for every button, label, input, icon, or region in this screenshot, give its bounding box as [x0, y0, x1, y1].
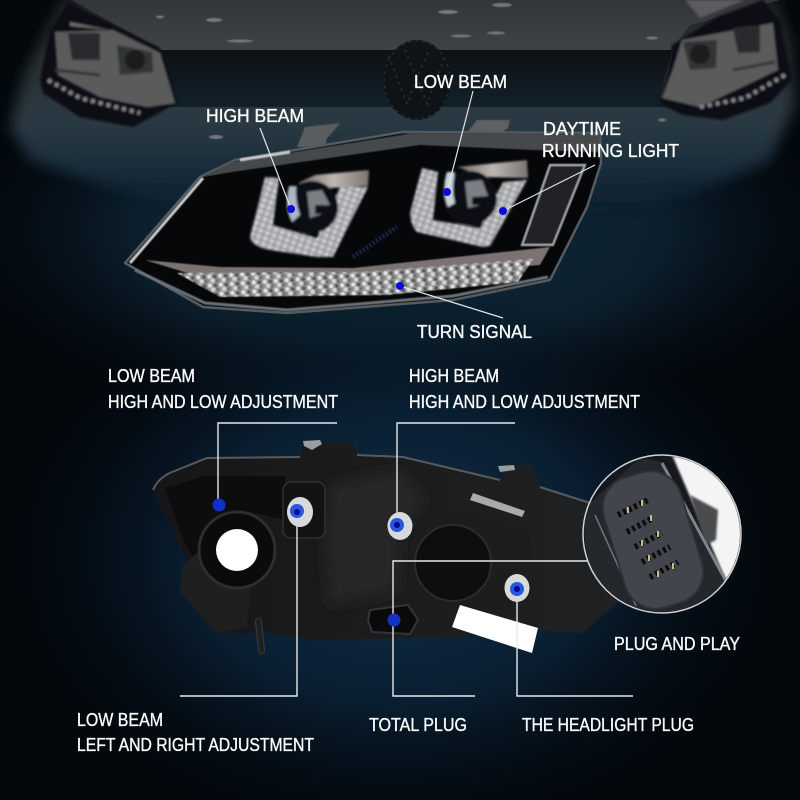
high beam U guide [250, 177, 368, 257]
car grille [158, 50, 672, 107]
connector shell [602, 470, 704, 610]
callout: low beam height adjuster [212, 498, 226, 512]
callout: headlight plug [504, 574, 530, 602]
label: high beam high and low adjustment: HIGH BEAM [409, 366, 499, 386]
label: low beam left and right adjustment: LOW BEAM [77, 710, 163, 730]
upper rim band [203, 133, 600, 177]
hood highlights [156, 3, 666, 139]
label: low beam high and low adjustment: LOW BEAM [108, 366, 195, 386]
label: low beam left and right adjustment [77, 710, 314, 755]
zoomed inset: plug connector [582, 454, 742, 614]
low beam chrome band [457, 160, 528, 178]
label: low beam high and low adjustment: HIGH AND LOW ADJUSTMENT [108, 392, 338, 412]
LED turn signal strip [177, 259, 533, 297]
low beam unit [410, 160, 528, 247]
label: low beam left and right adjustment: LEFT AND RIGHT ADJUSTMENT [77, 735, 314, 755]
side marker panel [522, 165, 585, 245]
outer rim [153, 455, 590, 503]
left cover [180, 545, 250, 633]
leader lines rear [180, 423, 633, 696]
headlight housing [125, 132, 601, 313]
rear housing [153, 442, 620, 640]
high beam chrome band [298, 170, 369, 188]
low beam lens [443, 171, 497, 225]
dust cap left [199, 512, 275, 588]
chrome bar [145, 247, 550, 280]
dust cap right [415, 525, 491, 601]
label: total plug: TOTAL PLUG [369, 715, 467, 735]
high beam unit [250, 170, 369, 257]
callout: high beam adjuster [388, 512, 412, 540]
rim highlight [130, 152, 290, 263]
gold pins [627, 500, 674, 577]
pin rows [618, 500, 678, 577]
leader lines front [260, 91, 595, 318]
mounting tabs [297, 123, 340, 147]
adjuster pin [255, 618, 265, 654]
panel: front headlight [125, 120, 601, 313]
high beam lens [286, 181, 338, 233]
label: low beam high and low adjustment [108, 366, 338, 412]
mounting tabs rear [303, 440, 322, 450]
label: high beam high and low adjustment [409, 366, 640, 412]
center block highlight [325, 470, 425, 605]
label: low beam: LOW BEAM [414, 72, 507, 92]
car fenders and bumper [10, 0, 795, 225]
socket holder [283, 482, 325, 538]
label: high beam: HIGH BEAM [206, 106, 304, 126]
barcode sticker [470, 493, 525, 517]
callout: low beam side adjuster [287, 497, 313, 527]
label: daytime running light: RUNNING LIGHT [542, 141, 679, 161]
label: daytime running light [542, 119, 679, 161]
label: high beam high and low adjustment: HIGH AND LOW ADJUSTMENT [409, 392, 640, 412]
housing [584, 458, 724, 612]
label: daytime running light: DAYTIME [543, 119, 621, 139]
blue interior reflection [353, 227, 397, 257]
dark latch on white [690, 495, 718, 545]
right car headlight [658, 0, 792, 120]
right housing lobe [420, 510, 535, 610]
label: plug and play: PLUG AND PLAY [614, 634, 740, 654]
callout dots front [287, 188, 507, 290]
low beam U guide [410, 168, 527, 247]
white lens left [216, 529, 258, 571]
white label [452, 605, 538, 653]
plug socket [368, 605, 418, 634]
VW emblem [383, 40, 451, 120]
lower rim [135, 270, 548, 310]
car hood [72, 0, 780, 50]
panel: car front view [10, 0, 795, 225]
left recess [165, 476, 285, 560]
left car headlight [40, 2, 177, 127]
label: turn signal: TURN SIGNAL [417, 322, 532, 342]
white backdrop [671, 456, 740, 580]
panel: rear headlight [153, 440, 620, 654]
callout: total plug [388, 614, 400, 626]
label: the headlight plug: THE HEADLIGHT PLUG [522, 715, 694, 735]
